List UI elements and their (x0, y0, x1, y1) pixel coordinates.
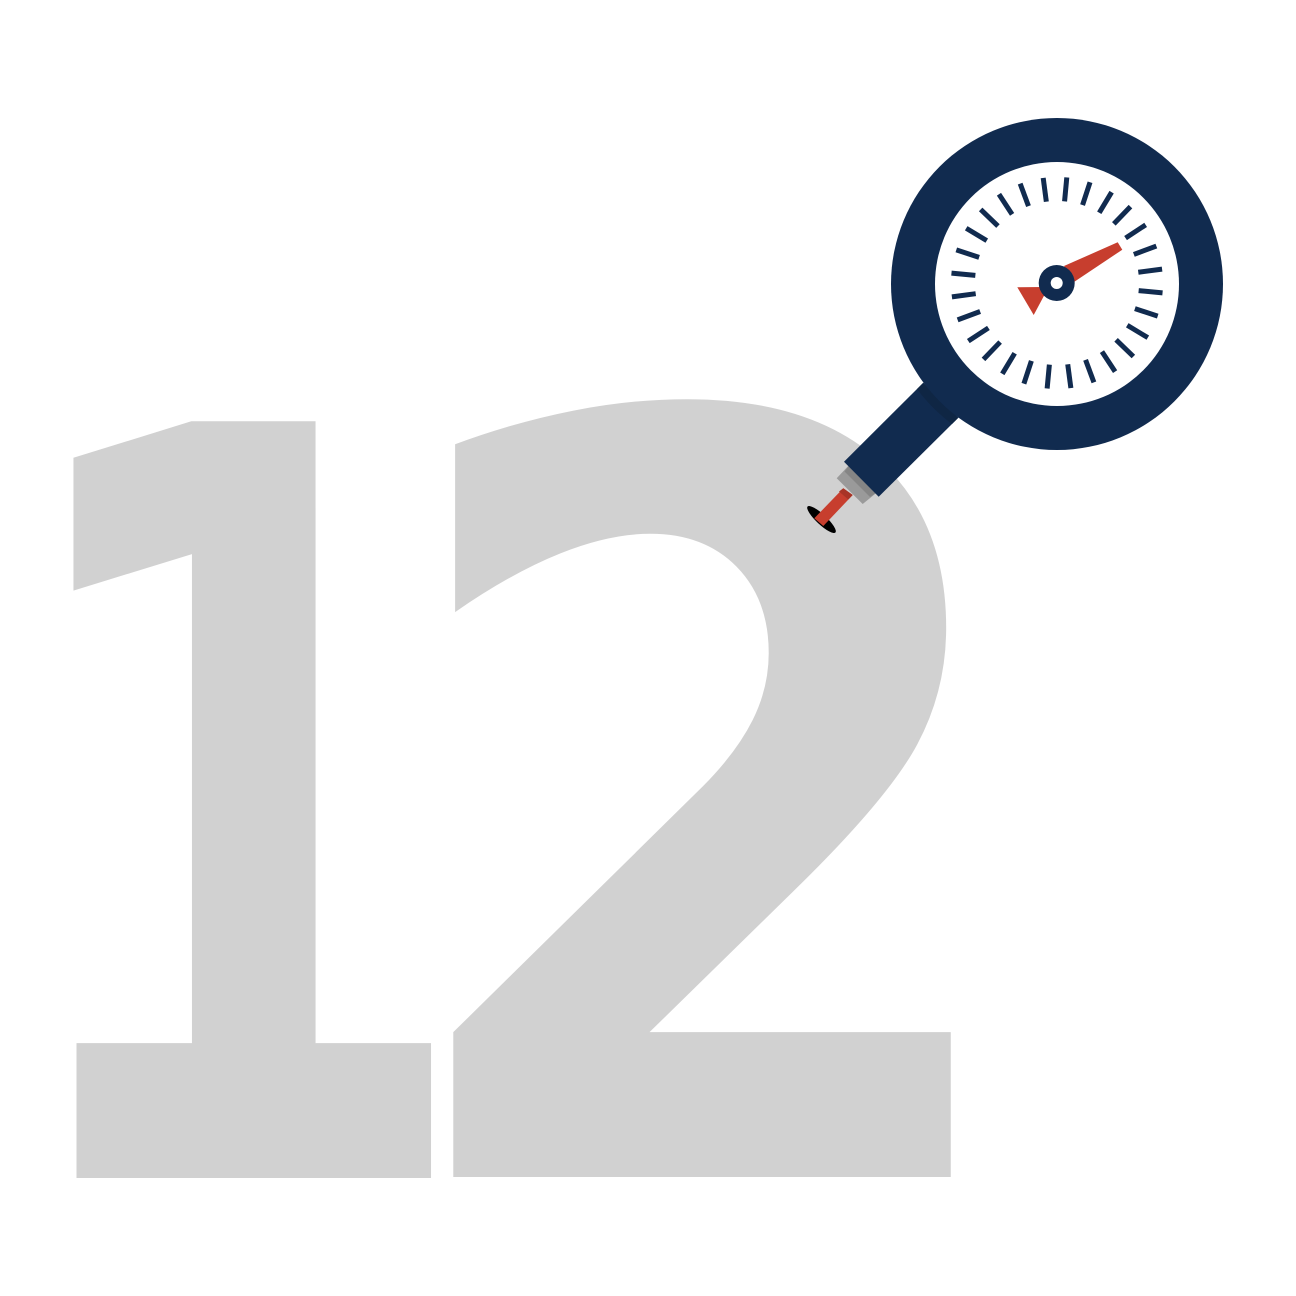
stem pin base (804, 503, 839, 536)
stem pin shadow (839, 488, 853, 500)
needle hub (1039, 265, 1075, 301)
dial tick marks (951, 177, 1163, 389)
stem red pin (814, 488, 853, 526)
gauge stem: pin and valve (804, 462, 880, 536)
gauge handle (844, 383, 958, 497)
gauge outer ring (891, 118, 1223, 450)
icon: pressure gauge (807, 118, 1223, 533)
valve collar shadow (844, 462, 880, 497)
gauge dial face (935, 162, 1179, 406)
hub centre hole (1051, 277, 1063, 289)
handle shadow band (917, 382, 958, 424)
red needle tail (1017, 287, 1046, 315)
red needle (1064, 242, 1122, 282)
valve collar (837, 462, 880, 504)
gauge assembly (804, 109, 1232, 536)
